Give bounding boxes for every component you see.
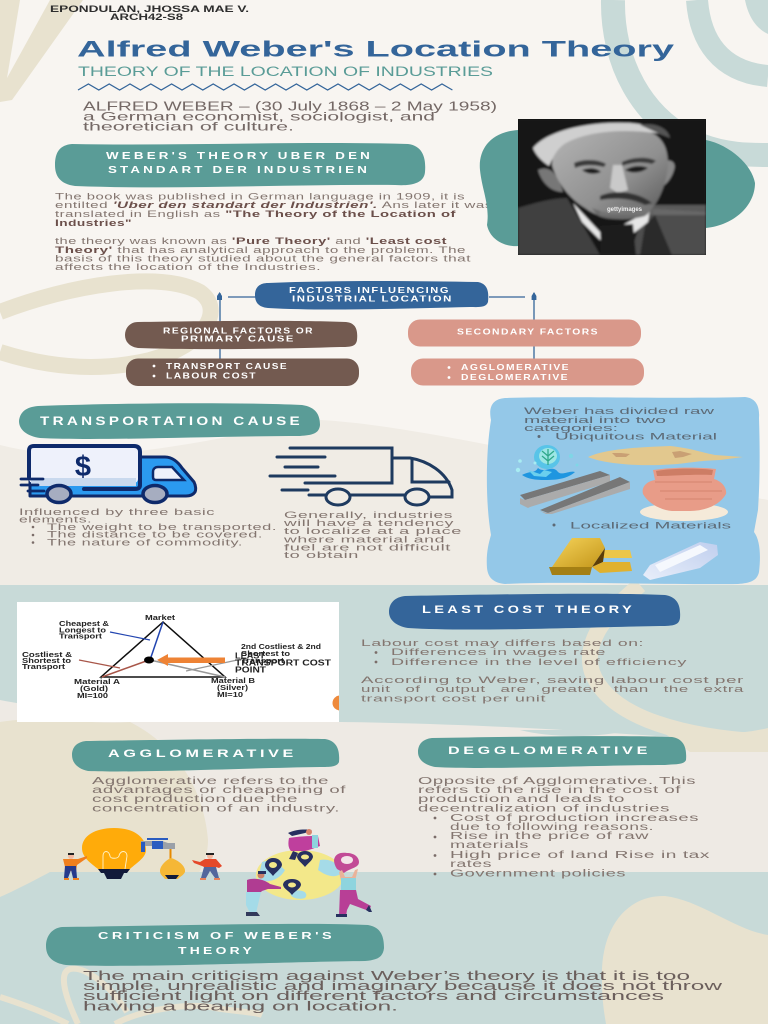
text: deglomerative definition: Rise in the price of raw <box>450 831 650 842</box>
text: deglomerative definition: rates <box>450 859 492 870</box>
book description text: Theory' that has analytical approach to the problem. The <box>55 245 466 255</box>
book description text: The book was published in German language in 1909, it is <box>55 192 466 202</box>
icon: steel beams <box>520 471 630 514</box>
node: transport cause and labour cost: LABOUR COST <box>166 370 257 380</box>
icon: crystal <box>643 542 718 580</box>
node: regional factors: PRIMARY CAUSE <box>181 334 295 344</box>
text: deglomerative definition: due to following reasons. <box>450 822 654 833</box>
text: deglomerative definition: Government policies <box>450 869 626 880</box>
chart: least cost triangle diagram: POINT <box>235 666 266 674</box>
text: deglomerative definition: Cost of production increases <box>450 813 699 824</box>
icon: clay pot <box>640 468 728 521</box>
biography text: a German economist, sociologist, and <box>83 110 435 124</box>
panel: raw materials <box>487 397 760 584</box>
panel text: two categories: Ubiquitous Material <box>555 432 717 442</box>
text: influenced by three elements: The nature of commodity. <box>47 537 243 547</box>
node: regional factors <box>125 321 357 349</box>
node: agglomerative and deglomerative: DEGLOMERATIVE <box>461 372 569 382</box>
node: factors influencing: INDUSTRIAL LOCATION <box>292 294 453 304</box>
panel text: two categories: material into two <box>524 415 666 426</box>
chart: least cost triangle diagram: 2nd Costliest & 2nd <box>241 644 321 651</box>
chart: least cost triangle diagram: Transport <box>59 634 103 640</box>
text: influenced by three elements <box>19 507 277 547</box>
chart: least cost triangle diagram: LEAST <box>235 652 265 660</box>
text: industries localize: Generally, industries <box>284 510 454 520</box>
text: deglomerative definition <box>418 776 710 880</box>
text: influenced by three elements: The weight to be transported. <box>47 522 277 532</box>
heading: transportation cause: TRANSPORTATION CAUSE <box>40 416 303 428</box>
book description text <box>55 192 493 272</box>
panel text: two categories: Localized Materials <box>570 520 731 532</box>
heading: agglomerative: AGGLOMERATIVE <box>108 748 297 760</box>
node: agglomerative and deglomerative: AGGLOMERATIVE <box>461 362 570 372</box>
text: industries localize <box>282 510 462 560</box>
text: agglomerative definition: concentration of an industry. <box>92 804 340 815</box>
illustration: people around globe with map pins <box>246 829 372 917</box>
book description text: Industries" <box>55 218 132 228</box>
text: industries localize: fuel are not difficult <box>284 543 452 553</box>
title: Alfred Weber's Location Theory <box>77 36 675 62</box>
text: deglomerative definition: Opposite of Agglomerative. This <box>418 776 696 787</box>
node: secondary factors: SECONDARY FACTORS <box>457 326 599 336</box>
book description text: affects the location of the Industries. <box>55 262 321 272</box>
node: factors influencing <box>255 281 488 310</box>
panel text: two categories <box>524 406 731 532</box>
biography text <box>83 98 497 134</box>
text: labour cost: According to Weber, saving labour cost per <box>361 675 744 685</box>
text: influenced by three elements: elements. <box>19 514 92 524</box>
panel text: two categories: Weber has divided raw <box>524 406 714 417</box>
portrait of Alfred Weber <box>480 119 755 255</box>
icon: blue delivery truck with dollar sign <box>21 446 196 502</box>
heading: degglomerative <box>418 736 686 768</box>
text: agglomerative definition <box>92 776 346 815</box>
node: secondary factors <box>408 320 641 346</box>
text: industries localize: to localize at a place <box>284 526 462 536</box>
icon: blue delivery truck with dollar sign: $ <box>75 451 91 483</box>
text: criticism paragraph: The main criticism against Weber’s theory is that it is too <box>83 969 690 983</box>
book description text: translated in English as "The Theory of the Location of <box>55 209 456 219</box>
node: agglomerative and deglomerative <box>411 358 644 386</box>
text: labour cost: transport cost per unit <box>361 694 547 704</box>
heading: criticism of Weber's theory: CRITICISM OF WEBER'S <box>98 930 335 942</box>
text: labour cost <box>361 638 744 704</box>
text: labour cost: unit of output are greater than the extra <box>361 684 744 694</box>
text: deglomerative definition: materials <box>450 840 529 851</box>
chart: least cost triangle diagram: Material B <box>211 678 255 685</box>
biography text: theoretician of culture. <box>83 120 294 134</box>
node: factors influencing: FACTORS INFLUENCING <box>289 285 450 295</box>
text: influenced by three elements: Influenced by three basic <box>19 507 216 517</box>
text: criticism paragraph: simple, unrealistic and imaginary because it does not throw <box>83 979 724 993</box>
book description text: entilted 'Uber den standart der Industrien'. Ans later it was <box>55 200 493 210</box>
heading: Weber's theory <box>55 143 425 187</box>
text: criticism paragraph: having a bearing on location. <box>83 1000 398 1014</box>
icon: water <box>516 445 578 480</box>
chart: least cost triangle diagram: (Silver) <box>217 685 248 692</box>
text: agglomerative definition: advantages or cheapening of <box>92 785 346 796</box>
text: influenced by three elements: The distance to be covered. <box>47 530 263 540</box>
chart: least cost triangle diagram: Shortest to <box>241 651 290 658</box>
icon: fast delivery truck outline <box>270 448 452 505</box>
heading: Weber's theory: WEBER'S THEORY UBER DEN <box>106 150 373 162</box>
subtitle: THEORY OF THE LOCATION OF INDUSTRIES <box>78 64 493 79</box>
illustration: light bulbs, tap and people <box>63 828 222 880</box>
text: deglomerative definition: refers to the rise in the cost of <box>418 785 681 796</box>
text: deglomerative definition: High price of land Rise in tax <box>450 850 710 861</box>
text: industries localize: will have a tendency <box>282 518 455 528</box>
heading: criticism of Weber's theory: THEORY <box>178 945 255 957</box>
heading: degglomerative: DEGGLOMERATIVE <box>448 745 651 757</box>
heading: least cost theory: LEAST COST THEORY <box>422 604 635 616</box>
author name <box>50 4 249 23</box>
node: transport cause and labour cost <box>126 358 359 386</box>
heading: transportation cause <box>19 403 320 439</box>
book description text: basis of this theory studied about the general factors that <box>55 254 471 264</box>
chart: least cost triangle diagram: Costliest & <box>22 652 72 659</box>
panel text: two categories: categories: <box>524 423 618 434</box>
node: regional factors: REGIONAL FACTORS OR <box>163 326 314 336</box>
chart: least cost triangle diagram: (Gold) <box>80 686 108 693</box>
chart: least cost triangle diagram: MI=10 <box>217 692 243 699</box>
chart: least cost triangle diagram: Transport <box>22 664 66 671</box>
chart: least cost triangle diagram <box>17 602 348 722</box>
author name: ARCH42-S8 <box>110 12 183 23</box>
heading: Weber's theory: STANDART DER INDUSTRIEN <box>108 164 370 176</box>
book description text: the theory was known as 'Pure Theory' and 'Least cost <box>55 236 447 246</box>
portrait of Alfred Weber: gettyimages <box>607 207 643 213</box>
text: industries localize: where material and <box>282 535 445 545</box>
biography text: ALFRED WEBER – (30 July 1868 – 2 May 1958) <box>83 98 497 114</box>
chart: least cost triangle diagram: Transport <box>241 658 285 665</box>
heading: criticism of Weber's theory <box>46 924 384 966</box>
heading: least cost theory <box>389 594 680 630</box>
text: labour cost: Difference in the level of efficiency <box>391 657 688 667</box>
text: criticism paragraph: sufficient light on different factors and circumstances <box>83 989 664 1003</box>
author name: EPONDULAN, JHOSSA MAE V. <box>50 4 249 15</box>
chart: least cost triangle diagram: Shortest to <box>22 658 71 665</box>
chart: least cost triangle diagram: Market <box>145 615 176 622</box>
chart: least cost triangle diagram: Longest to <box>59 628 106 634</box>
icon: sand <box>588 446 743 465</box>
node: transport cause and labour cost: TRANSPORT CAUSE <box>166 361 288 371</box>
text: labour cost: Differences in wages rate <box>391 647 606 657</box>
chart: least cost triangle diagram: MI=100 <box>77 693 108 700</box>
text: industries localize: to obtain <box>284 550 359 560</box>
flowchart: factors influencing industrial location <box>125 281 644 386</box>
chart: least cost triangle diagram: Material A <box>74 679 120 686</box>
text: agglomerative definition: cost production due the <box>92 794 298 805</box>
text: deglomerative definition: production and leads to <box>418 794 625 805</box>
text: labour cost: Labour cost may differs based on: <box>361 638 644 648</box>
chart: least cost triangle diagram: Cheapest & <box>59 621 109 628</box>
heading: agglomerative <box>72 739 339 771</box>
text: agglomerative definition: Agglomerative refers to the <box>92 776 329 787</box>
text: deglomerative definition: decentralization of industries <box>418 804 670 815</box>
text: criticism paragraph <box>83 969 724 1014</box>
icon: gold bars <box>549 538 632 575</box>
chart: least cost triangle diagram: TRANSPORT COST <box>235 658 331 668</box>
